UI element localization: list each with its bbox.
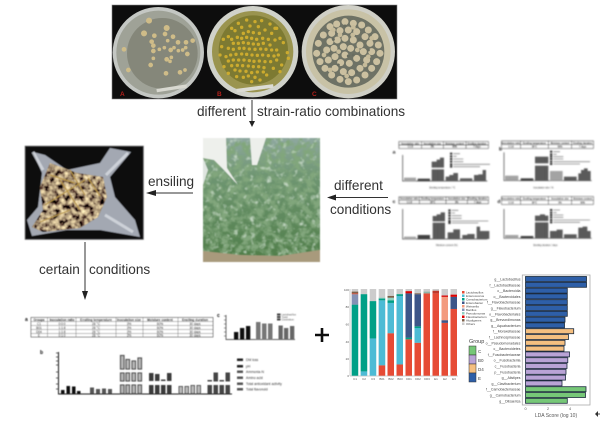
- chart a: Inoculation size: [424, 142, 442, 145]
- legend: LEfSe groups: B0: [478, 358, 484, 363]
- plate B: [207, 6, 298, 97]
- chart c: Moisture content (%): [436, 244, 458, 247]
- chart a: 1:1:8: [408, 147, 414, 149]
- legend: bacterial genera: Lactobacillus: [466, 290, 484, 294]
- stacked bar chart: bacterial composition: B02: [388, 377, 394, 381]
- stacked bar chart: bacterial composition: 20: [346, 357, 349, 361]
- table a: experimental groups: 28 °C: [92, 330, 101, 334]
- chart: LDA score bars: g__Lactobacillus: [494, 278, 521, 282]
- plate A: [113, 7, 204, 98]
- stacked bar chart: bacterial composition: E3: [452, 377, 456, 381]
- stacked bar chart: bacterial composition: C2: [362, 377, 366, 381]
- chart b: Moisture content: [551, 142, 570, 145]
- chart b: Inoculation ratio: [502, 142, 521, 145]
- chart b: Ensiling temperature: [523, 142, 547, 145]
- chart b: 7 days: [579, 147, 587, 149]
- table a: experimental groups: 28 °C: [92, 326, 101, 330]
- caption: certain conditions: [39, 262, 150, 277]
- chart c: 7 days: [474, 202, 482, 204]
- chart d: 3%: [558, 202, 563, 204]
- chart: LDA score bars: p__Fusobacteria: [494, 370, 521, 374]
- chart c: bottom-left small bars: [217, 313, 297, 340]
- chart: LDA score bars: c__Bacteroidia: [497, 289, 521, 293]
- stacked bar chart: bacterial composition: 0: [347, 374, 349, 378]
- chart: LDA score bars: o__Fusobacteriia: [494, 359, 521, 363]
- chart b: 30°C: [532, 147, 537, 149]
- legend: bacterial genera: [462, 290, 488, 326]
- chart c: Inoculation size: [448, 198, 466, 201]
- chart d: Moisture content: [573, 198, 592, 201]
- caption: different strain-ratio combinations: different: [197, 104, 246, 119]
- chart: LDA score bars: o__Flavobacteriales: [489, 312, 521, 316]
- plate letters: A: [120, 91, 125, 98]
- table a: experimental groups: 30 days: [189, 334, 201, 338]
- chart b: fermentation indicators: Total antioxidant activity: [246, 382, 282, 386]
- chart c: Inoculation ratio: [400, 198, 419, 201]
- table a: experimental groups: Inoculation size: [117, 318, 141, 322]
- chart d: 1:1:8: [508, 202, 514, 204]
- chart: LDA score bars: LDA Score (log 10): [535, 413, 577, 419]
- chart: LDA score bars: 4: [569, 407, 571, 411]
- caption: different conditions: [330, 178, 391, 217]
- caption: different conditions: conditions: [330, 202, 391, 217]
- chart c: 3%: [455, 202, 459, 204]
- legend: bacterial genera: Enterococcus: [466, 294, 485, 298]
- chart c: Ensiling temperature: [421, 198, 445, 201]
- plate letters: [120, 91, 317, 98]
- chart a: 3%: [431, 147, 435, 149]
- table a: experimental groups: 1:1:8: [58, 326, 66, 330]
- table a: experimental groups: 60%: [157, 334, 163, 338]
- chart: LDA score bars: g__Alistipes: [502, 376, 521, 380]
- chart d: Ensiling duration / days: [533, 244, 558, 247]
- legend: bacterial genera: Flavobacterium: [466, 315, 487, 319]
- stacked bar chart: bacterial composition: B03: [397, 377, 403, 381]
- stacked bar chart: bacterial composition: C3: [371, 377, 375, 381]
- table a: experimental groups: C1: [37, 322, 41, 326]
- table a: experimental groups: B01: [36, 326, 42, 330]
- chart c: bottom-left small bars: Lactobacillus: [282, 314, 297, 316]
- caption: different strain-ratio combinations: strain-ratio combinations: [257, 104, 405, 119]
- legend: bacterial genera: Enterobacter: [466, 301, 483, 305]
- chart d: 30°C: [532, 202, 537, 204]
- stacked bar chart: bacterial composition: 60: [346, 322, 349, 326]
- chart: LDA score bars: g__Brevundimonas: [490, 318, 521, 322]
- table a: experimental groups: 3%: [127, 334, 131, 338]
- legend: bacterial genera: Alcaligenes: [466, 318, 482, 322]
- legend: bacterial genera: Others: [466, 322, 476, 326]
- chart: LDA score bars: g__Carnobacterium: [490, 394, 521, 398]
- stacked bar chart: bacterial composition: B01: [379, 377, 385, 381]
- table a: experimental groups: 28 °C: [92, 334, 101, 338]
- chart b: 60%: [558, 147, 563, 149]
- table a: experimental groups: Moisture content: [147, 318, 174, 322]
- chart b: fermentation indicators: Amino acid: [246, 376, 263, 380]
- chart: LDA score bars: f__Fusobacteriaceae: [488, 353, 521, 357]
- table a: experimental groups: 28 °C: [92, 322, 101, 326]
- stacked bar chart: bacterial composition: [344, 288, 458, 381]
- chart: LDA score bars: f__Moraxellaceae: [493, 330, 521, 334]
- chart b: fermentation indicators: pH: [246, 364, 251, 368]
- chart: LDA score bars: [486, 275, 590, 419]
- table a: experimental groups: 30 days: [189, 322, 201, 326]
- table a: experimental groups: D04: [36, 330, 42, 334]
- chart d: 60%: [580, 202, 586, 204]
- table a: experimental groups: a: [25, 317, 28, 323]
- plate letters: B: [217, 91, 222, 98]
- chart b: fermentation indicators: b: [40, 350, 43, 356]
- chart c: bottom-left small bars: Clostridium: [282, 318, 294, 322]
- legend: bacterial genera: Carnobacterium: [466, 298, 488, 302]
- chart b: 1:1:8: [508, 147, 514, 149]
- photo: vacuum-sealed silage bag: [25, 146, 144, 240]
- chart c: Ensiling duration: [468, 198, 488, 201]
- plate C: [302, 5, 395, 98]
- chart b: fermentation indicators: DM loss: [246, 358, 259, 362]
- chart a: Moisture content: [445, 142, 464, 145]
- table a: experimental groups: 3%: [127, 330, 131, 334]
- chart b: fermentation indicators: Ammonia-N: [246, 370, 264, 374]
- table a: experimental groups: 3%: [127, 322, 131, 326]
- caption: different conditions: different: [334, 178, 383, 193]
- chart a: 60%: [452, 147, 458, 149]
- chart c: 1:1:8: [407, 202, 413, 204]
- plus sign: [315, 328, 329, 342]
- chart c: 30°C: [430, 202, 436, 204]
- chart c: c: [393, 199, 396, 205]
- chart b: b: [499, 146, 502, 152]
- chart: LDA score bars: g__Dilsaerica: [499, 399, 521, 403]
- chart b: [499, 141, 593, 190]
- chart a: 7 days: [473, 147, 481, 149]
- stacked bar chart: bacterial composition: C1: [353, 377, 357, 381]
- caption: certain conditions: certain: [39, 262, 80, 277]
- stacked bar chart: bacterial composition: E1: [434, 377, 438, 381]
- arrow: tree to silage: [146, 190, 193, 196]
- plate letters: C: [312, 91, 317, 98]
- chart d: d: [497, 199, 500, 205]
- table a: experimental groups: 3%: [127, 326, 131, 330]
- chart c: bottom-left small bars: Yeast: [282, 316, 288, 319]
- chart: LDA score bars: o__Bacteroidales: [493, 295, 521, 299]
- panel: condition charts a to d: [393, 141, 593, 247]
- legend: LEfSe groups: D4: [478, 367, 484, 372]
- chart: LDA score bars: f__Flavobacteriaceae: [487, 301, 521, 305]
- chart a: Ensiling temperature / °C: [429, 187, 456, 190]
- arrow: conditions to tree: [327, 194, 388, 200]
- table a: experimental groups: 30 days: [189, 326, 201, 330]
- table a: experimental groups: 0:0:0: [58, 322, 66, 326]
- table a: experimental groups: 1:1:8: [58, 330, 66, 334]
- legend: LEfSe groups: C: [478, 349, 482, 354]
- legend: LEfSe groups: Group: [469, 339, 484, 345]
- chart: LDA score bars: c__Fusobacteria: [495, 364, 521, 368]
- stacked bar chart: bacterial composition: D01: [406, 377, 412, 381]
- chart c: bottom-left small bars: c: [217, 313, 220, 319]
- chart b: Ensiling duration: [573, 142, 593, 145]
- stacked bar chart: bacterial composition: 40: [346, 340, 349, 344]
- chart a: Inoculation ratio: [401, 142, 420, 145]
- table a: experimental groups: E: [38, 334, 40, 338]
- table a: experimental groups: 60%: [157, 326, 163, 330]
- panel: agar plates A B C: [112, 5, 397, 99]
- caption: ensiling: ensiling: [148, 174, 194, 189]
- table a: experimental groups: Groups: [33, 318, 45, 322]
- table a: experimental groups: 60%: [157, 322, 163, 326]
- table a: experimental groups: 0:1:0: [58, 334, 66, 338]
- stacked bar chart: bacterial composition: 100: [344, 288, 349, 292]
- table a: experimental groups: Ensiling temperature: [80, 318, 112, 322]
- chart b: fermentation indicators: Total flavonoid: [246, 388, 268, 392]
- chart: LDA score bars: o__Pseudomonadales: [486, 341, 521, 345]
- stacked bar chart: bacterial composition: 80: [346, 305, 349, 309]
- chart b: Inoculation size / %: [533, 187, 553, 190]
- arrow: silage to results: [82, 242, 88, 300]
- chart: LDA score bars: g__Flavobacterium: [491, 306, 521, 310]
- legend: LEfSe groups: E: [478, 376, 481, 381]
- stacked bar chart: bacterial composition: E2: [443, 377, 447, 381]
- chart: LDA score bars: c__Bacteroidetes: [493, 347, 521, 351]
- photo: mulberry tree: [203, 138, 320, 262]
- arrow: plates to tree: [249, 100, 255, 127]
- stacked bar chart: bacterial composition: D02: [415, 377, 421, 381]
- table a: experimental groups: [25, 317, 213, 338]
- stacked bar chart: bacterial composition: D03: [424, 377, 430, 381]
- chart a: [393, 142, 490, 190]
- chart d: Inoculation size: [551, 198, 569, 201]
- chart: LDA score bars: g__Clavibacterium: [492, 382, 521, 386]
- chart: LDA score bars: 2: [547, 407, 549, 411]
- legend: bacterial genera: Bacillus: [466, 308, 477, 312]
- caption: certain conditions: conditions: [89, 262, 150, 277]
- small return arrow: [595, 411, 600, 417]
- chart d: Inoculation ratio: [502, 198, 521, 201]
- chart c: [393, 197, 489, 247]
- chart d: Ensiling temperature: [523, 198, 547, 201]
- chart: LDA score bars: f__Lachnospiraceae: [489, 336, 521, 340]
- chart a: Ensiling duration: [467, 142, 487, 145]
- chart: LDA score bars: 0: [524, 407, 527, 411]
- chart a: a: [393, 150, 396, 156]
- chart d: [497, 197, 593, 247]
- table a: experimental groups: Ensiling duration: [182, 318, 208, 322]
- chart: LDA score bars: g__Aquabacterium: [491, 324, 521, 328]
- table a: experimental groups: 30 days: [189, 330, 201, 334]
- chart: LDA score bars: f__Carnobacteriaceae: [486, 388, 521, 392]
- table a: experimental groups: 60%: [157, 330, 163, 334]
- chart: LDA score bars: f__Lactobacillaceae: [490, 283, 521, 287]
- legend: LEfSe groups: [469, 339, 484, 382]
- chart b: fermentation indicators: [40, 350, 282, 394]
- legend: bacterial genera: Pseudomonas: [466, 312, 486, 316]
- table a: experimental groups: Inoculation ratio: [50, 318, 74, 322]
- legend: bacterial genera: Weissella: [466, 304, 479, 308]
